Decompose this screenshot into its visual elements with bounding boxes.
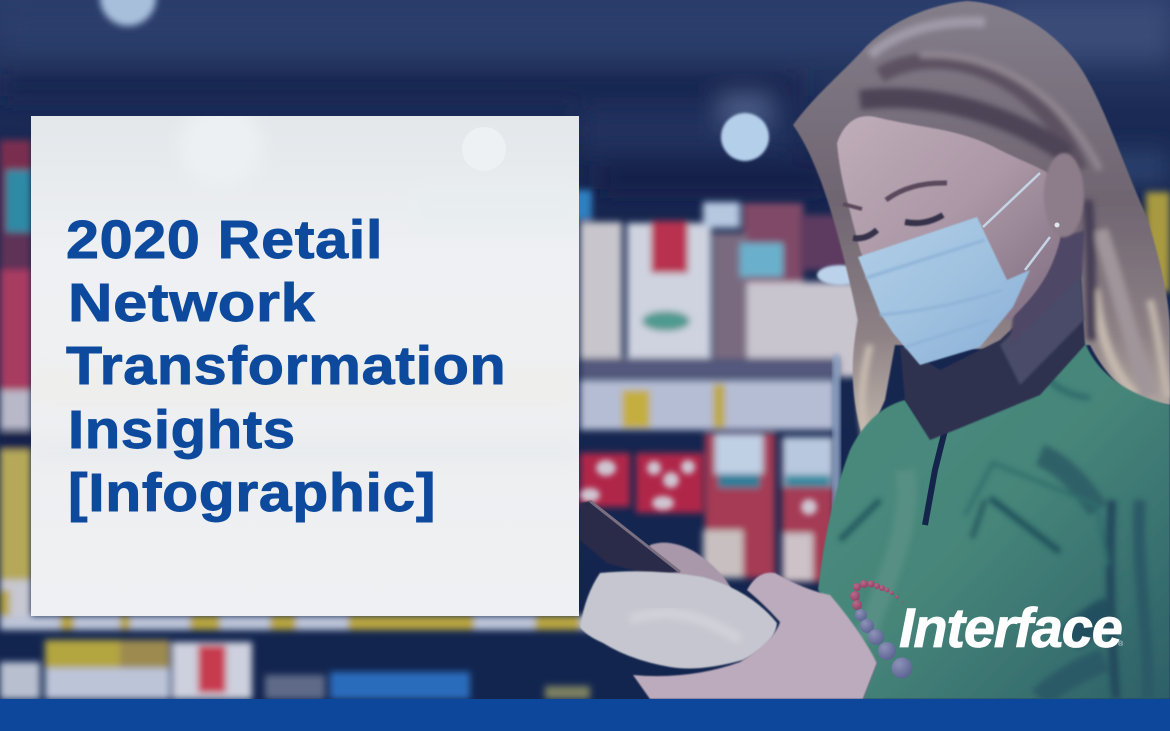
ceiling light: [721, 113, 769, 161]
logo: Interface: [850, 580, 1124, 678]
title: Insights: [68, 401, 296, 460]
neck shadow: [1010, 230, 1085, 345]
bottom bar: [0, 699, 1170, 731]
title: [Infographic]: [68, 464, 436, 523]
face: [837, 116, 1062, 320]
ear: [1044, 153, 1084, 237]
jacket: [818, 337, 1170, 699]
scarf: [900, 265, 1085, 440]
right hand: [633, 573, 877, 699]
logo wordmark: Interface: [899, 596, 1122, 659]
jacket zipper: [925, 430, 945, 525]
title: Transformation: [66, 337, 506, 396]
hair: [793, 1, 1170, 445]
left hand holding phone and food package: [580, 501, 777, 668]
mask: [858, 217, 1030, 365]
translucent title panel: [31, 116, 579, 616]
panel background bokeh: [193, 116, 506, 152]
hair strands: [860, 22, 1168, 440]
eyebrows and eyes: [843, 183, 947, 238]
jacket shadows and pockets: [840, 350, 1148, 699]
registered mark: ®: [1118, 641, 1123, 648]
shopper: hair, jacket, scarf, face and mask: [793, 1, 1170, 699]
ear loops and earring: [983, 173, 1050, 270]
store shelves: [0, 140, 863, 699]
title: 2020 Retail: [66, 211, 383, 270]
title: [66, 211, 506, 523]
title: Network: [68, 274, 316, 333]
